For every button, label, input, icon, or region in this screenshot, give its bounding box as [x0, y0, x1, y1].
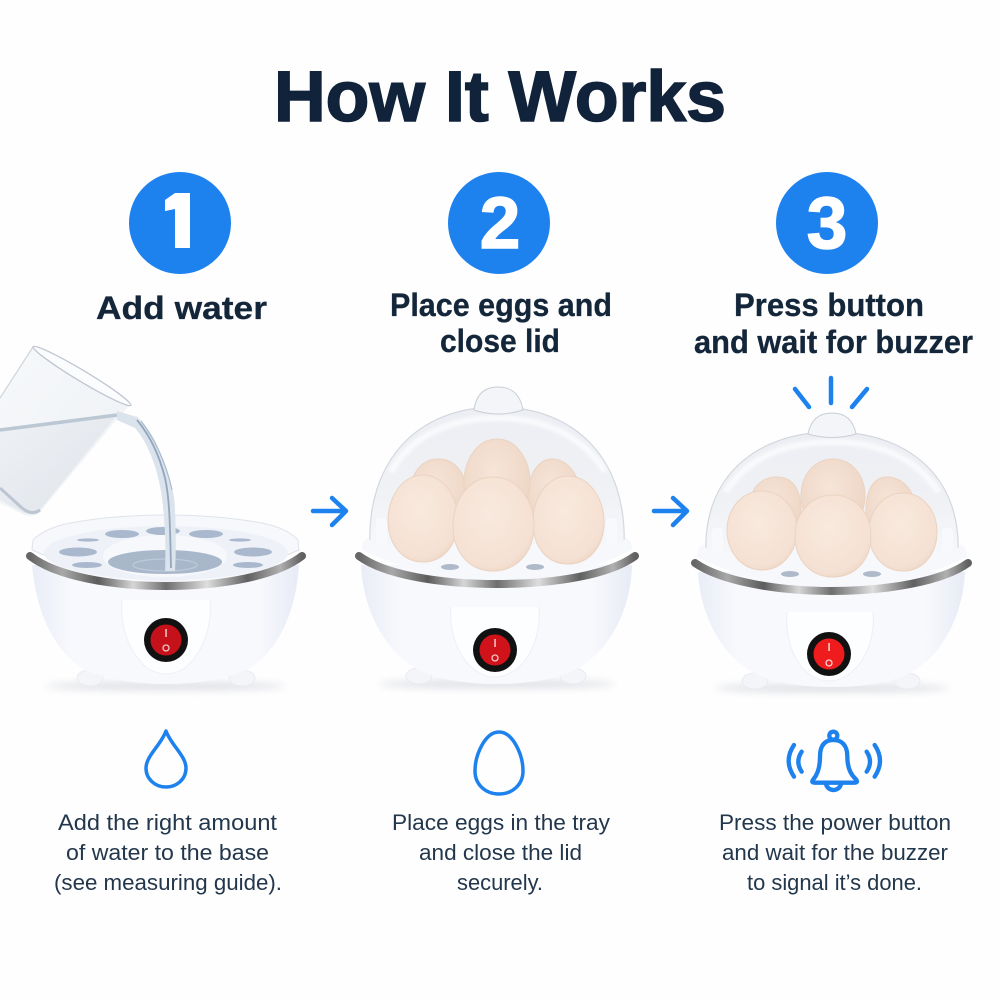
icon: ringing bell: [789, 732, 880, 790]
feet: [406, 668, 586, 684]
tray holes: [441, 564, 544, 570]
power switch: [807, 632, 851, 676]
control panel: [787, 612, 873, 681]
water well: [103, 535, 227, 577]
step 1 number badge: [129, 172, 231, 274]
step 3 description: Press the power button: [719, 810, 951, 835]
step 2 heading: close lid: [440, 323, 560, 359]
tray holes: [781, 571, 881, 577]
step 3 description: [719, 810, 951, 895]
control panel: [451, 607, 539, 677]
base body: [698, 572, 965, 687]
tray: [362, 538, 632, 582]
base body: [361, 565, 632, 684]
step 2 description: [392, 810, 610, 895]
step 1 description: Add the right amount: [58, 810, 277, 835]
lid highlight: [392, 418, 604, 470]
control panel: [122, 600, 210, 674]
step 2 description: securely.: [457, 870, 543, 895]
lid knob: [808, 413, 856, 438]
water stream: [117, 411, 176, 571]
step 1 heading: Add water: [96, 290, 267, 326]
title: How It Works: [274, 58, 726, 137]
buzzer rays above cooker 3: [795, 378, 867, 407]
step 1 description: [54, 810, 282, 895]
step 3 heading: and wait for buzzer: [694, 324, 973, 360]
step 2 description: and close the lid: [419, 840, 582, 865]
power switch: [473, 628, 517, 672]
step 2 heading: [390, 287, 612, 359]
icon: egg: [475, 732, 523, 794]
step 3 number badge: 3: [807, 183, 847, 264]
step 1 description: of water to the base: [66, 840, 269, 865]
step 3 description: and wait for the buzzer: [722, 840, 948, 865]
egg cooker 2 with eggs and lid: [359, 387, 635, 688]
eggs: [727, 459, 937, 577]
egg cooker 1 with open tray: [30, 515, 302, 690]
step 2 number badge: 2: [480, 183, 520, 264]
tray: [32, 515, 299, 580]
step 1 description: (see measuring guide).: [54, 870, 282, 895]
feet: [742, 673, 920, 689]
step 2 heading: Place eggs and: [390, 287, 612, 323]
step 3 description: to signal it’s done.: [747, 870, 922, 895]
clear dome lid: [706, 432, 958, 555]
step 2 number badge: [448, 172, 550, 274]
water pitcher pouring: [0, 342, 176, 571]
step 1 number badge: 1: [158, 179, 201, 267]
tray tabs: [376, 518, 617, 554]
feet: [77, 670, 255, 686]
step 2 description: Place eggs in the tray: [392, 810, 610, 835]
lid highlight: [727, 442, 937, 490]
egg cooker 3 with eggs and lid: [695, 413, 968, 692]
steel rim: [695, 563, 968, 591]
icon: water drop: [146, 731, 186, 787]
lid knob: [474, 387, 523, 414]
tray holes: [59, 527, 272, 568]
water in jug: [0, 415, 117, 514]
step 3 number badge: [776, 172, 878, 274]
glass jug: [0, 347, 130, 516]
clear dome lid: [370, 407, 624, 548]
steel rim: [359, 556, 635, 584]
step 3 heading: [694, 287, 973, 360]
arrow between steps 1 and 2: [313, 498, 346, 525]
eggs: [388, 439, 604, 571]
power switch: [144, 618, 188, 662]
tray tabs: [712, 528, 953, 561]
base body: [32, 565, 299, 684]
steel rim: [30, 556, 302, 586]
tray: [697, 545, 967, 589]
arrow between steps 2 and 3: [654, 498, 687, 525]
step 3 heading: Press button: [734, 287, 924, 323]
